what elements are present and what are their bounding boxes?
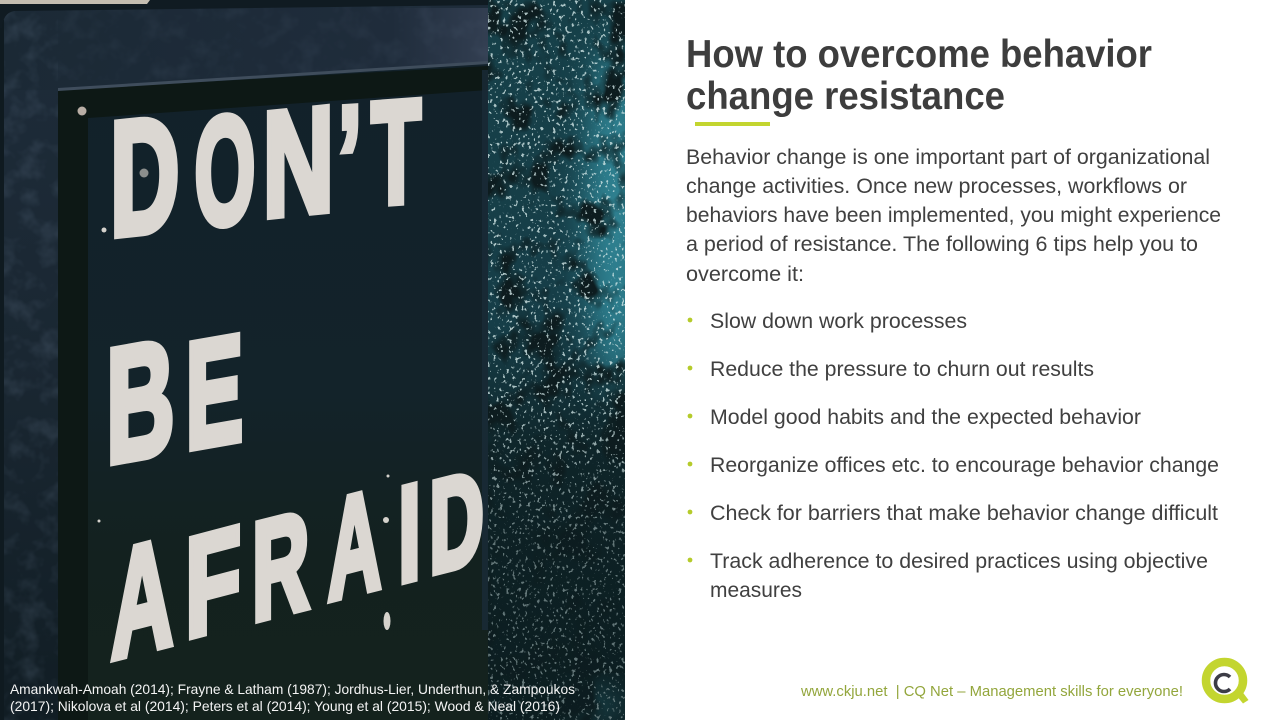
tip 5: Check for barriers that make behavior change difficult <box>710 501 1218 525</box>
intro text block: Behavior change is one important part of organizational <box>686 145 1210 169</box>
panel: sign photograph <box>0 0 646 720</box>
photo: sign lettering: B <box>106 305 175 499</box>
title <box>686 33 1152 118</box>
title: change resistance <box>686 75 1005 118</box>
citation <box>10 681 575 714</box>
photo: sign lettering: T <box>371 70 421 235</box>
photo: sign lettering: N <box>263 74 334 249</box>
photo: sign lettering: I <box>398 455 421 611</box>
photo: sign lettering: A <box>111 505 173 692</box>
photo: teal textured wall <box>488 0 625 720</box>
photo: sign lettering: A <box>328 458 381 630</box>
title: How to overcome behavior <box>686 33 1152 76</box>
intro text block: behaviors have been implemented, you might experience <box>686 203 1221 227</box>
tip 3: Model good habits and the expected behavior <box>710 405 1141 429</box>
citation: Amankwah-Amoah (2014); Frayne & Latham (1987); Jordhus-Lier, Underthun, & Zampoukos <box>10 681 575 697</box>
photo: sign lettering: O <box>195 82 255 259</box>
title underline accent <box>695 122 770 126</box>
tip 1: Slow down work processes <box>710 309 967 333</box>
intro text block: a period of resistance. The following 6 tips help you to <box>686 232 1198 256</box>
photo: sign lettering: D <box>430 442 484 602</box>
photo: sign lettering <box>110 96 483 664</box>
tip 2: Reduce the pressure to churn out results <box>710 357 1094 381</box>
intro text block: overcome it: <box>686 262 804 286</box>
icon: rivet <box>78 106 86 116</box>
photo: sign lettering: E <box>186 303 243 482</box>
photo: dark sign face <box>58 61 488 720</box>
photo: sign lettering: F <box>185 496 241 669</box>
photo: sign lettering: R <box>252 482 309 652</box>
citation: (2017); Nikolova et al (2014); Peters et al (2014); Young et al (2015); Wood & Neal (2016) <box>10 698 560 714</box>
photo: metal sign frame <box>0 0 490 720</box>
list: six tips <box>688 309 1219 602</box>
tip 4: Reorganize offices etc. to encourage behavior change <box>710 453 1219 477</box>
tip 6 <box>688 549 1208 602</box>
photo: paint chips on sign <box>98 168 390 630</box>
intro text block: change activities. Once new processes, workflows or <box>686 174 1187 198</box>
tip 6: Track adherence to desired practices using objective <box>710 549 1208 573</box>
tip 6: measures <box>710 578 802 602</box>
photo: sign lettering: ’ <box>338 75 362 243</box>
icon: CQ logo <box>1206 662 1248 704</box>
photo: sign lettering: D <box>110 83 180 271</box>
footer text: www.ckju.net | CQ Net – Management skills for everyone! <box>800 683 1183 700</box>
intro text block <box>686 145 1221 286</box>
